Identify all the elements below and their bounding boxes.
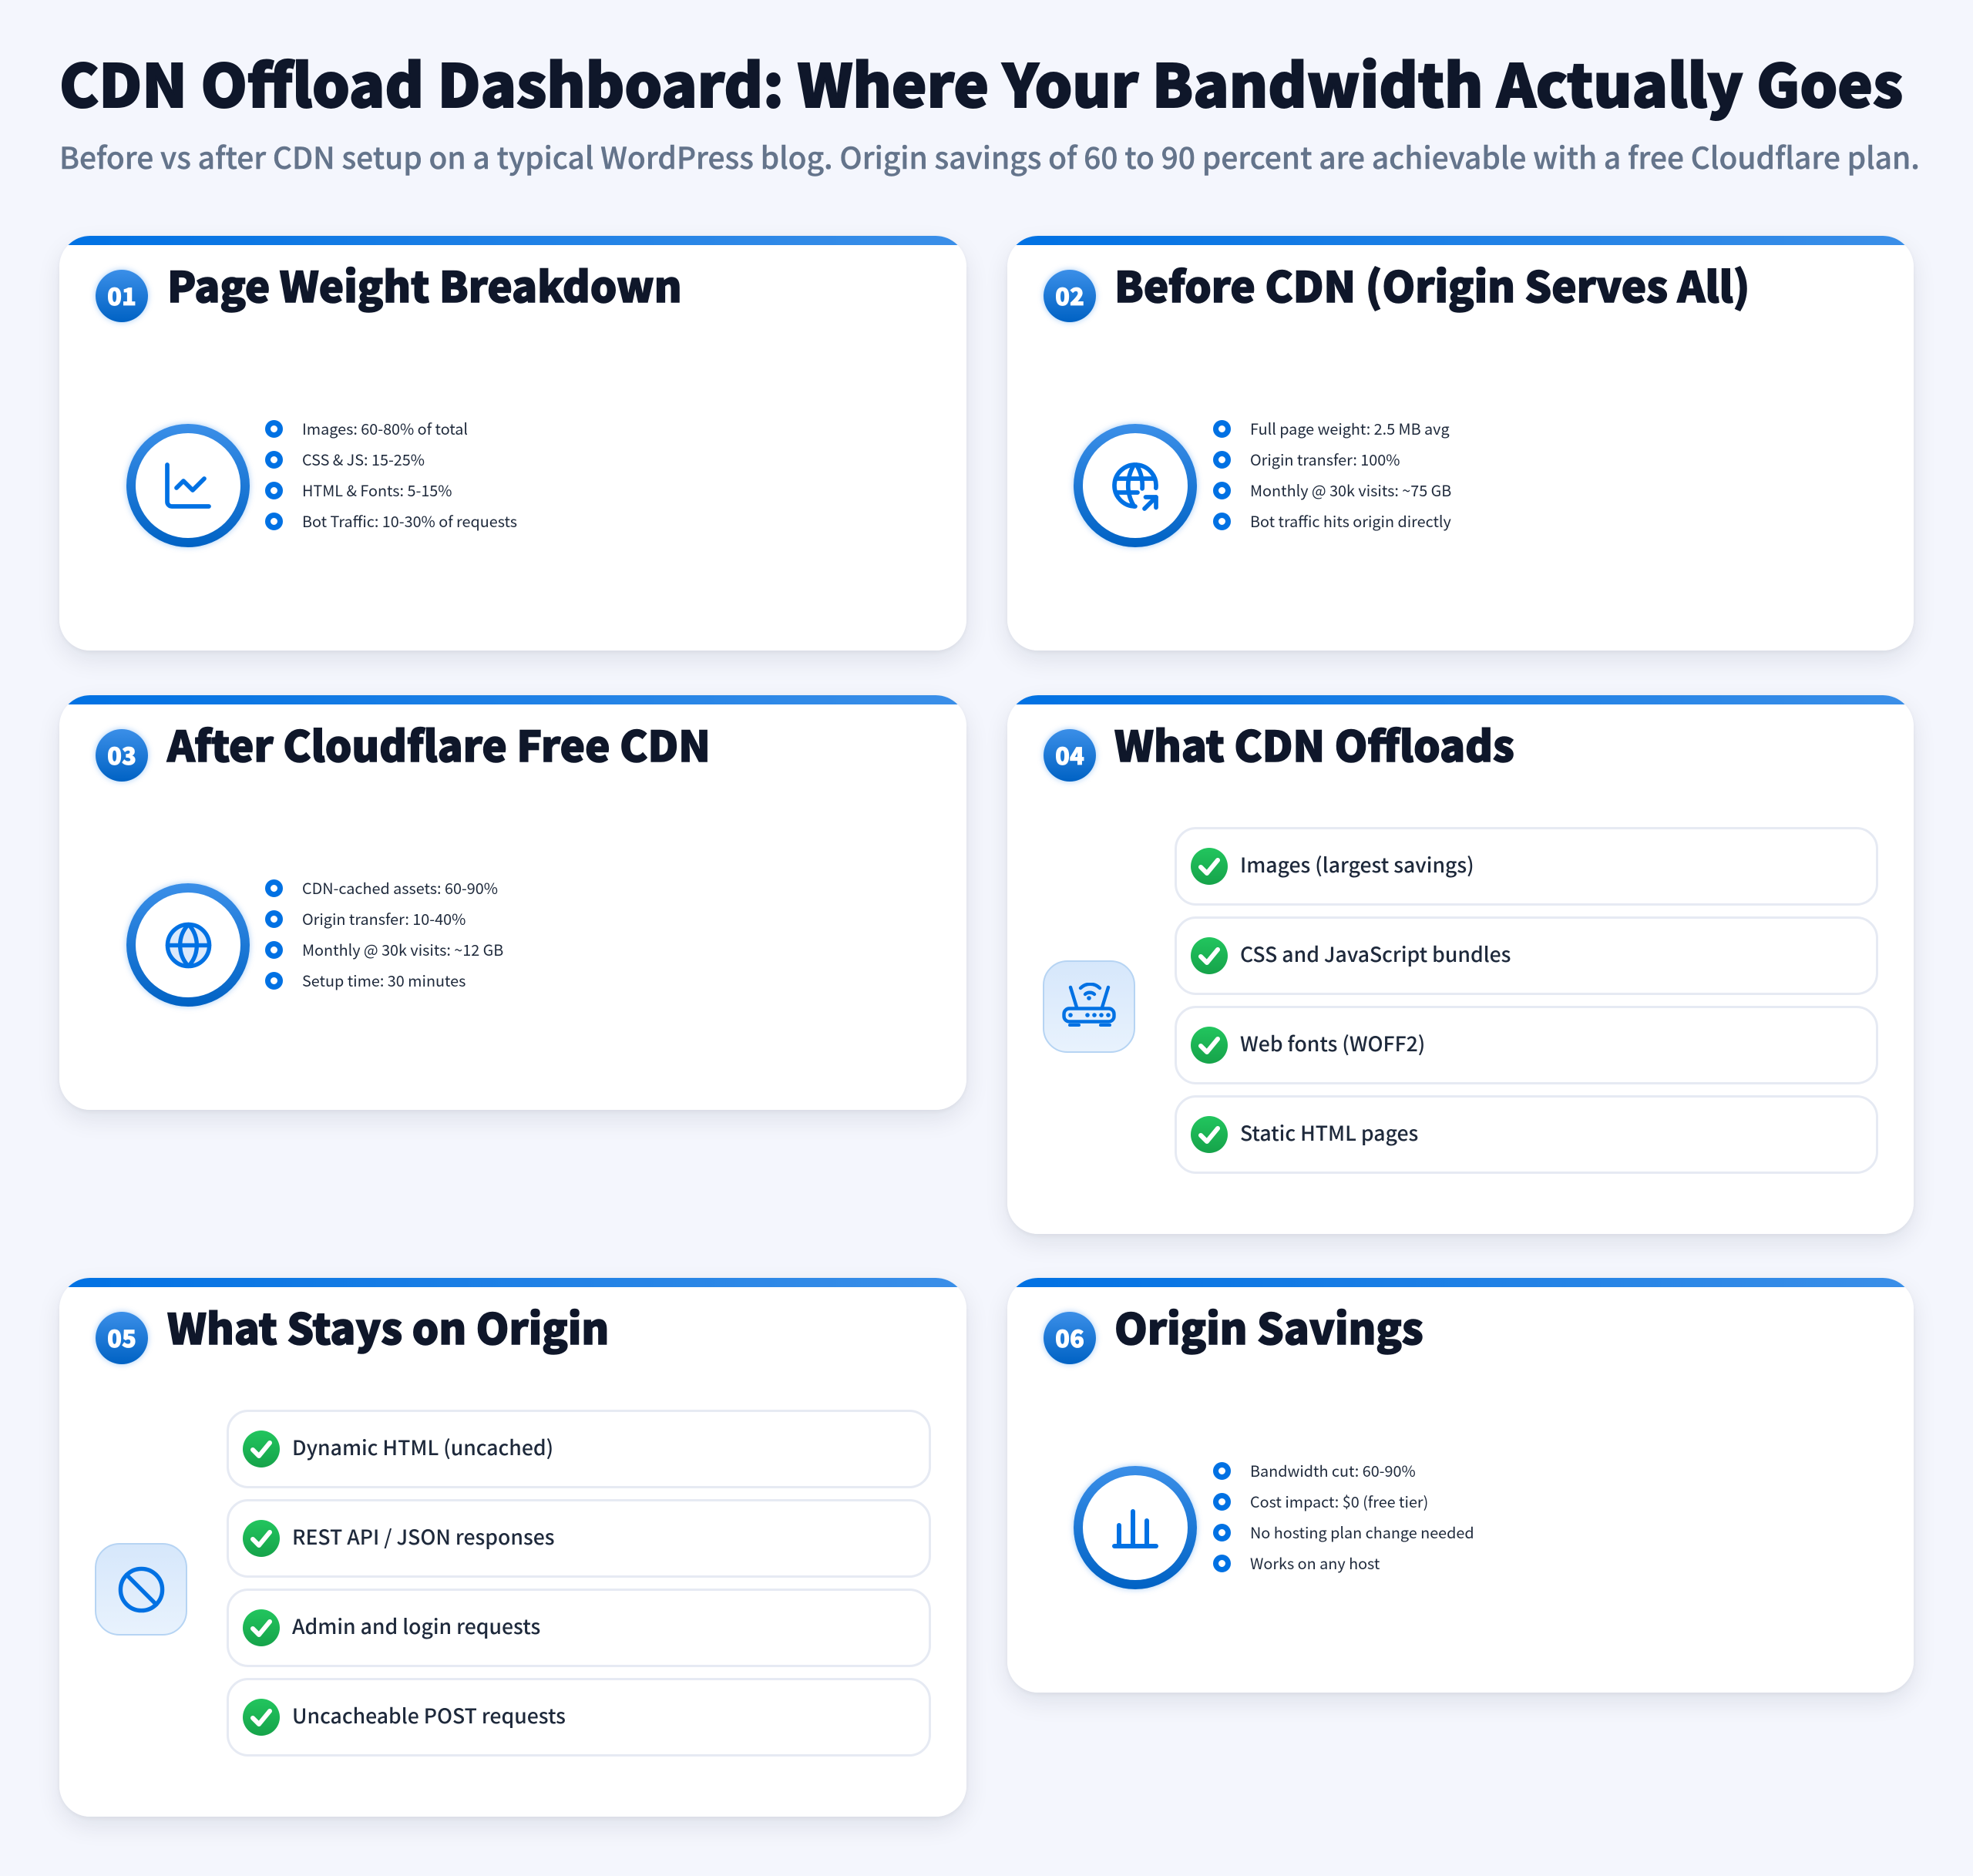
list item <box>227 1589 931 1667</box>
list item: Admin and login requests <box>292 1610 540 1640</box>
bullet: Bandwidth cut: 60-90% <box>1250 1459 1416 1481</box>
bullet: Bot traffic hits origin directly <box>1250 509 1451 532</box>
title: CDN Offload Dashboard: Where Your Bandwidth Actually Goes <box>59 39 1903 125</box>
list item: Images (largest savings) <box>1240 849 1474 879</box>
badge 02 <box>1044 270 1096 322</box>
panel: after Cloudflare <box>59 695 966 1110</box>
badge 05: 05 <box>107 1320 136 1354</box>
bullet: Images: 60-80% of total <box>302 417 468 439</box>
panel: origin savings <box>1007 1278 1914 1693</box>
bullet: Setup time: 30 minutes <box>302 969 466 991</box>
bullet: Monthly @ 30k visits: ~75 GB <box>1250 479 1451 501</box>
bullet: Full page weight: 2.5 MB avg <box>1250 417 1450 439</box>
heading: After Cloudflare Free CDN <box>167 713 711 774</box>
bullet: HTML & Fonts: 5-15% <box>302 479 452 501</box>
icon: ban <box>95 1543 187 1636</box>
list item: Dynamic HTML (uncached) <box>292 1431 553 1461</box>
bullet: Works on any host <box>1250 1552 1380 1574</box>
list item: REST API / JSON responses <box>292 1521 555 1551</box>
badge 02: 02 <box>1055 277 1084 312</box>
bullet: Origin transfer: 10-40% <box>302 907 466 930</box>
heading: Before CDN (Origin Serves All) <box>1114 254 1749 314</box>
bullet: CSS & JS: 15-25% <box>302 448 425 470</box>
panel: before CDN <box>1007 236 1914 651</box>
list item <box>1175 1095 1878 1174</box>
list item: Static HTML pages <box>1240 1117 1418 1147</box>
icon: bar chart <box>1074 1466 1197 1589</box>
list item <box>1175 916 1878 995</box>
panel: what stays on origin <box>59 1278 966 1817</box>
badge 06: 06 <box>1055 1320 1084 1354</box>
heading: Origin Savings <box>1114 1296 1423 1357</box>
badge 06 <box>1044 1312 1096 1364</box>
list item <box>1175 1006 1878 1084</box>
panel: page weight breakdown <box>59 236 966 651</box>
bullet: Origin transfer: 100% <box>1250 448 1400 470</box>
bullet: Bot Traffic: 10-30% of requests <box>302 509 517 532</box>
list item <box>1175 827 1878 906</box>
list item: Web fonts (WOFF2) <box>1240 1027 1425 1057</box>
list item: Uncacheable POST requests <box>292 1699 566 1730</box>
subtitle: Before vs after CDN setup on a typical WordPress blog. Origin savings of 60 to 90 percent are achievable with a free Cloudflare plan. <box>59 135 1920 178</box>
bullet: Monthly @ 30k visits: ~12 GB <box>302 938 503 960</box>
icon: line chart <box>126 424 250 547</box>
icon: router <box>1043 960 1135 1053</box>
list item <box>227 1678 931 1757</box>
bullet: No hosting plan change needed <box>1250 1521 1474 1543</box>
heading: Page Weight Breakdown <box>167 254 682 314</box>
badge 05 <box>96 1312 148 1364</box>
badge 01: 01 <box>107 277 136 312</box>
bullet: CDN-cached assets: 60-90% <box>302 876 498 899</box>
list item <box>227 1499 931 1578</box>
badge 04: 04 <box>1055 737 1084 772</box>
list item: CSS and JavaScript bundles <box>1240 938 1511 968</box>
panel: what CDN offloads <box>1007 695 1914 1234</box>
badge 01 <box>96 270 148 322</box>
heading: What Stays on Origin <box>167 1296 609 1357</box>
badge 04 <box>1044 729 1096 782</box>
badge 03 <box>96 729 148 782</box>
badge 03: 03 <box>107 737 136 772</box>
icon: globe with arrow <box>1074 424 1197 547</box>
icon: globe <box>126 883 250 1007</box>
heading: What CDN Offloads <box>1114 713 1514 774</box>
bullet: Cost impact: $0 (free tier) <box>1250 1490 1428 1512</box>
list item <box>227 1410 931 1488</box>
